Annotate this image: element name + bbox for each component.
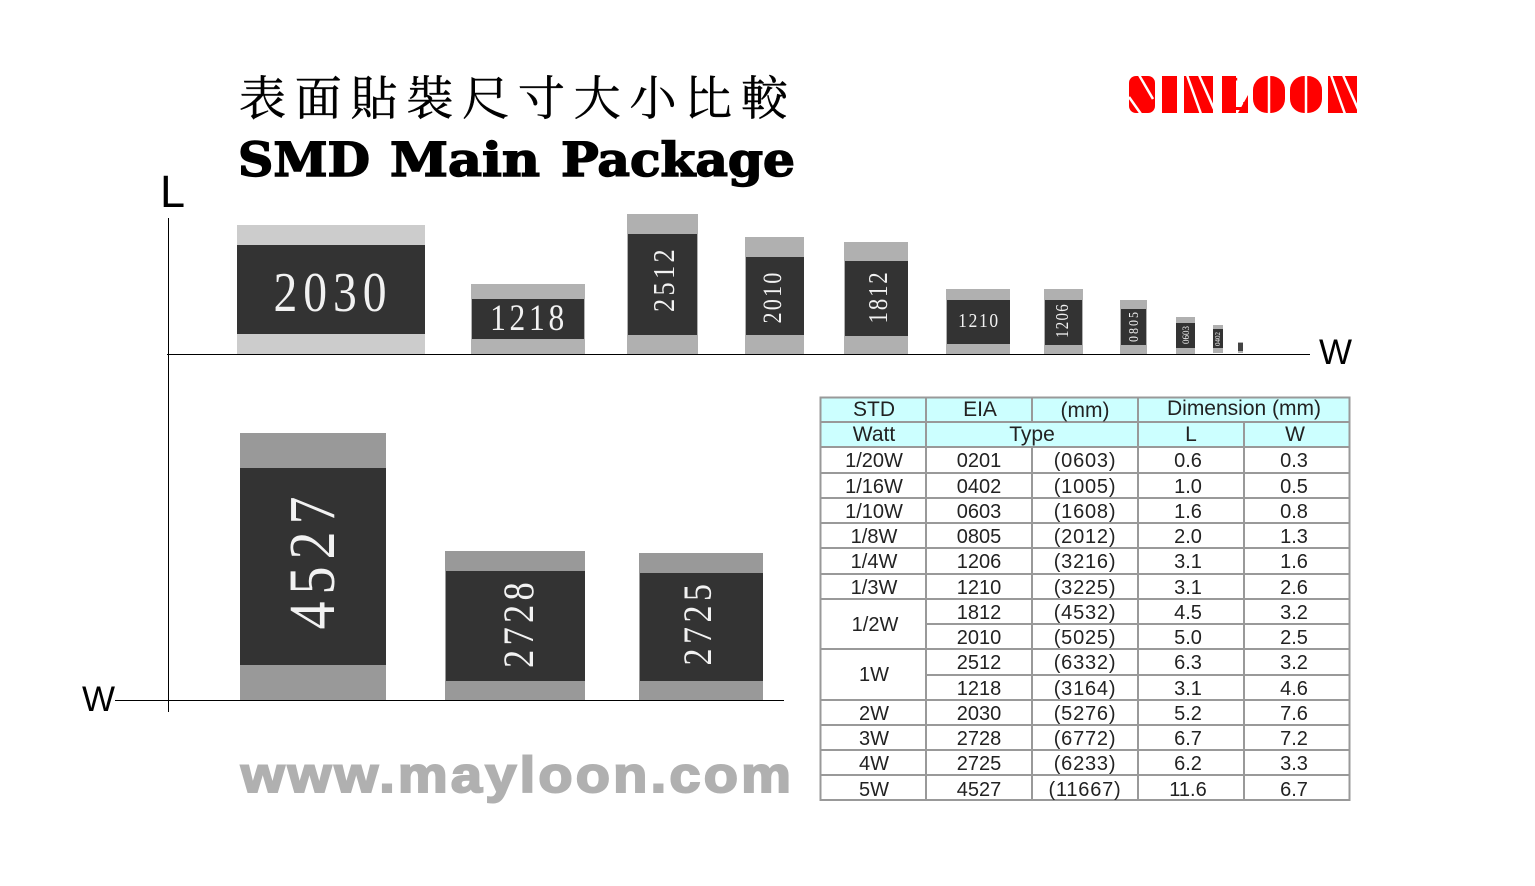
table body text: 6.2 xyxy=(1174,753,1202,775)
title: Chinese heading: 表面貼裝尺寸大小比較 xyxy=(239,74,789,126)
chip: 2030: 2030 xyxy=(274,263,392,324)
table body text: 0603 xyxy=(957,501,1001,523)
table header text: (mm) xyxy=(1061,399,1109,422)
table body text: (4532) xyxy=(1054,602,1116,624)
chip: 1218 xyxy=(471,284,585,354)
table header text: STD xyxy=(853,398,895,421)
chip: 2512: 2512 xyxy=(647,246,682,312)
table body text: (11667) xyxy=(1048,779,1122,801)
table header text: Type xyxy=(1009,423,1055,446)
table grid xyxy=(820,397,1350,800)
logo: SINLOON: S xyxy=(1131,70,1153,121)
website URL: www.mayloon.com xyxy=(240,748,791,803)
table body text: 7.6 xyxy=(1280,703,1308,725)
table body text xyxy=(845,450,1308,801)
table body text: 0402 xyxy=(957,476,1001,498)
logo: SINLOON: I xyxy=(1164,70,1176,121)
table body text: 6.3 xyxy=(1174,652,1202,674)
table body text: 2.5 xyxy=(1280,627,1308,649)
table body text: 3.1 xyxy=(1174,577,1202,599)
chip: 2728: 2728 xyxy=(494,578,543,668)
chip: 4527 xyxy=(240,433,386,700)
chip: 4527: 4527 xyxy=(276,489,349,630)
axis: top W axis xyxy=(167,354,1310,356)
table body text: 1/8W xyxy=(851,526,897,548)
chip: 2512 xyxy=(627,214,698,354)
chip: 0402: 0402 xyxy=(1214,332,1222,346)
table body text: 1.6 xyxy=(1174,501,1202,523)
logo: SINLOON: N xyxy=(1186,70,1211,121)
chip: 0805 xyxy=(1120,300,1147,354)
table body text: 3.2 xyxy=(1280,602,1308,624)
table body text: 4.6 xyxy=(1280,678,1308,700)
table header text: Watt xyxy=(853,423,895,446)
table header text: EIA xyxy=(963,398,997,421)
axis label: W right: W xyxy=(1319,333,1352,372)
logo: SINLOON: L xyxy=(1224,70,1246,121)
table body text: 1.3 xyxy=(1280,526,1308,548)
table body text: 0.6 xyxy=(1174,450,1202,472)
logo: SINLOON: O xyxy=(1256,70,1282,121)
chip: 1206 xyxy=(1044,289,1083,354)
table body text: 5.2 xyxy=(1174,703,1202,725)
table header text xyxy=(853,397,1321,446)
table body text: 1/2W xyxy=(852,614,898,636)
table body text: (6332) xyxy=(1054,652,1116,674)
table body text: 1/20W xyxy=(845,450,903,472)
chip: 0201 xyxy=(1238,342,1243,353)
table body text: 2728 xyxy=(957,728,1001,750)
table body text: 1/16W xyxy=(845,476,903,498)
table body text: 2010 xyxy=(957,627,1001,649)
title: English heading: Package xyxy=(561,133,795,188)
chip: 1210: 1210 xyxy=(958,310,1000,332)
table body text: 7.2 xyxy=(1280,728,1308,750)
chip: 1218: 1218 xyxy=(490,298,568,339)
chip: 2728 xyxy=(445,551,585,700)
chip: 1206: 1206 xyxy=(1053,303,1072,338)
table body text: 0.5 xyxy=(1280,476,1308,498)
table body text: 6.7 xyxy=(1280,779,1308,801)
table header text: Dimension (mm) xyxy=(1167,397,1321,420)
table body text: (6233) xyxy=(1054,753,1116,775)
table body text: 0.8 xyxy=(1280,501,1308,523)
table body text: (0603) xyxy=(1054,450,1116,472)
table body text: 4W xyxy=(859,753,889,775)
table body text: 1812 xyxy=(957,602,1001,624)
chip: 0603: 0603 xyxy=(1181,326,1191,344)
table body text: 1.0 xyxy=(1174,476,1202,498)
table body text: (1005) xyxy=(1054,476,1116,498)
table body text: 2725 xyxy=(957,753,1001,775)
chip: 1210 xyxy=(946,289,1010,354)
chip: 0805: 0805 xyxy=(1125,310,1141,342)
table body text: 4.5 xyxy=(1174,602,1202,624)
table body text: 1206 xyxy=(957,551,1001,573)
table body text: (6772) xyxy=(1054,728,1116,750)
chip: 0603 xyxy=(1176,317,1195,354)
table body text: 4527 xyxy=(957,779,1001,801)
table body text: (5025) xyxy=(1054,627,1116,649)
axis label: W left: W xyxy=(82,680,115,719)
table body text: 11.6 xyxy=(1169,779,1207,801)
chip: 2725 xyxy=(639,553,763,700)
table body text: 3.1 xyxy=(1174,551,1202,573)
chip: 2010: 2010 xyxy=(759,270,787,324)
table body text: 3.3 xyxy=(1280,753,1308,775)
table body text: 1218 xyxy=(957,678,1001,700)
table body text: 1/4W xyxy=(851,551,897,573)
table body text: (3164) xyxy=(1054,678,1116,700)
table body text: (3216) xyxy=(1054,551,1116,573)
table body text: 2.6 xyxy=(1280,577,1308,599)
table body text: (5276) xyxy=(1054,703,1116,725)
table body text: 1/3W xyxy=(851,577,897,599)
table body text: 2.0 xyxy=(1174,526,1202,548)
table body text: 2030 xyxy=(957,703,1001,725)
axis: bottom W axis xyxy=(115,700,784,702)
table header text: L xyxy=(1185,423,1197,446)
table body text: 2512 xyxy=(957,652,1001,674)
chip: 2010 xyxy=(745,237,804,354)
table header background xyxy=(820,397,1350,447)
table body text: 1/10W xyxy=(845,501,903,523)
table: SMD dimensions xyxy=(820,397,1350,801)
logo: SINLOON xyxy=(1129,70,1358,121)
table body text: 5W xyxy=(859,779,889,801)
chip: 2725: 2725 xyxy=(677,579,721,666)
table body text: (3225) xyxy=(1054,577,1116,599)
table body text: 1W xyxy=(859,664,889,686)
table body text: 1210 xyxy=(957,577,1001,599)
title: English heading: Main xyxy=(390,133,540,188)
table header text: W xyxy=(1285,423,1305,446)
chip: 0402 xyxy=(1213,325,1223,353)
axis label: L: L xyxy=(160,166,185,217)
axis: vertical L axis xyxy=(168,218,170,712)
logo: SINLOON: O xyxy=(1293,70,1319,121)
chip: 1812 xyxy=(844,242,908,354)
table body text: 3W xyxy=(859,728,889,750)
table body text: 3.1 xyxy=(1174,678,1202,700)
title: English heading: SMD xyxy=(238,133,370,188)
table body text: 6.7 xyxy=(1174,728,1202,750)
chip: 2030 xyxy=(237,225,425,354)
chip: 1812: 1812 xyxy=(864,270,893,324)
table body text: (2012) xyxy=(1054,526,1116,548)
table body text: 0201 xyxy=(957,450,1001,472)
table body text: (1608) xyxy=(1054,501,1116,523)
table body text: 0.3 xyxy=(1280,450,1308,472)
logo: SINLOON: N xyxy=(1330,70,1355,121)
table body text: 1.6 xyxy=(1280,551,1308,573)
table body text: 3.2 xyxy=(1280,652,1308,674)
table body text: 5.0 xyxy=(1174,627,1202,649)
table body text: 0805 xyxy=(957,526,1001,548)
table body text: 2W xyxy=(859,703,889,725)
